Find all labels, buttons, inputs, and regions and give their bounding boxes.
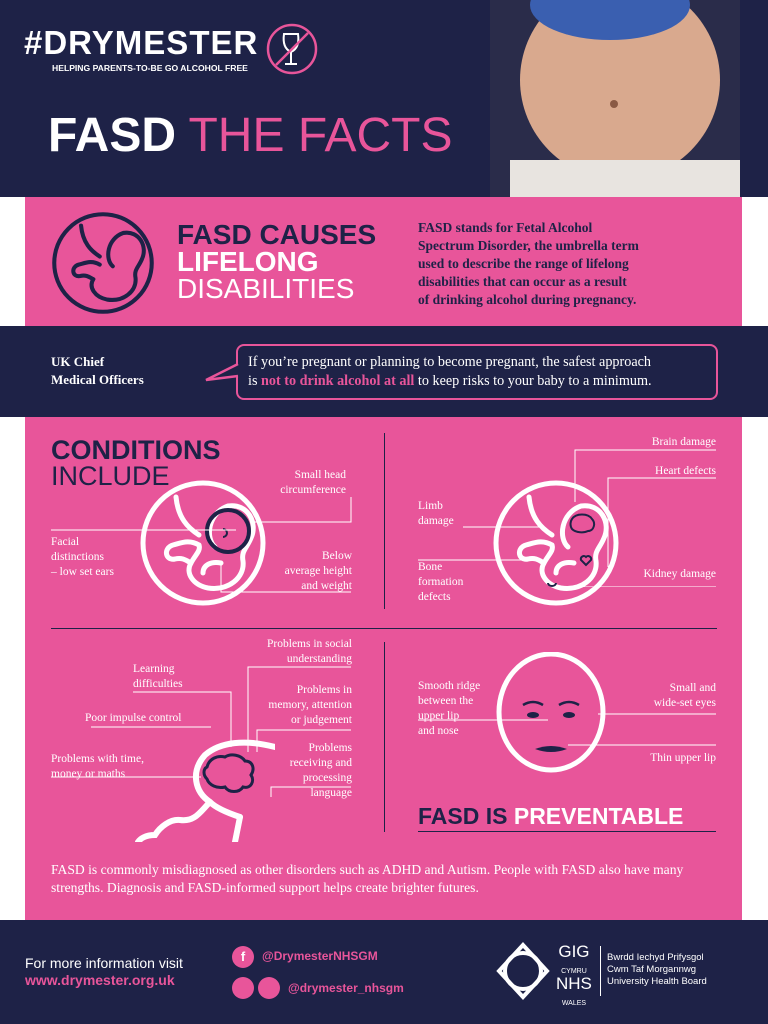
panel: conditions: money or maths bbox=[51, 768, 125, 780]
panel: conditions: Heart defects bbox=[655, 465, 716, 477]
heading: conditions include bbox=[51, 435, 221, 491]
panel: conditions: Problems with time, bbox=[51, 753, 144, 765]
panel: conditions: and weight bbox=[301, 580, 352, 592]
text block: bottom note: strengths. Diagnosis and FASD-informed support helps create brighter futures. bbox=[51, 880, 479, 895]
text block: bottom note bbox=[51, 862, 684, 895]
panel: conditions: processing bbox=[303, 772, 352, 784]
text block: FASD stands for Fetal Alcohol bbox=[418, 220, 592, 235]
panel: conditions: average height bbox=[285, 565, 352, 577]
panel: conditions: difficulties bbox=[133, 678, 183, 690]
heading: DISABILITIES bbox=[177, 273, 354, 304]
panel: conditions: Small head bbox=[295, 469, 346, 481]
text: more info: www.drymester.org.uk bbox=[25, 972, 175, 988]
panel: conditions: defects bbox=[418, 591, 451, 603]
panel: conditions: and nose bbox=[418, 725, 459, 737]
panel: conditions: Limb bbox=[418, 500, 443, 512]
panel: conditions: receiving and bbox=[290, 757, 352, 769]
panel: causes bbox=[25, 197, 742, 326]
text block: used to describe the range of lifelong bbox=[418, 256, 629, 271]
panel: conditions: Brain damage bbox=[652, 436, 716, 448]
logo bbox=[24, 24, 318, 74]
footer bbox=[0, 920, 768, 1024]
heading: FASD CAUSES bbox=[177, 219, 376, 250]
text: more info bbox=[25, 955, 183, 988]
icon: fetus quadrant 1 bbox=[140, 480, 266, 606]
heading bbox=[177, 219, 376, 304]
panel: conditions: Bone bbox=[418, 561, 442, 573]
social handles: @DrymesterNHSGM bbox=[262, 949, 378, 963]
panel: conditions: distinctions bbox=[51, 551, 104, 563]
header band bbox=[0, 0, 768, 197]
photo: pregnant belly bbox=[490, 0, 740, 197]
logo: NHS Wales: GIG bbox=[558, 942, 590, 961]
icon: head with brain bbox=[135, 740, 275, 842]
logo: NHS Wales bbox=[496, 942, 707, 1007]
callout: is not to drink alcohol at all to keep risks to your baby to a minimum. bbox=[248, 373, 652, 389]
panel: CMO advice: Medical Officers bbox=[51, 372, 144, 387]
text block: Spectrum Disorder, the umbrella term bbox=[418, 238, 639, 253]
panel: conditions: Learning bbox=[133, 663, 175, 675]
social handles: @drymester_nhsgm bbox=[288, 981, 404, 995]
text: more info: For more information visit bbox=[25, 955, 183, 971]
logo: HELPING PARENTS-TO-BE GO ALCOHOL FREE bbox=[52, 63, 248, 73]
social handles: f bbox=[241, 949, 245, 964]
panel: conditions: circumference bbox=[280, 484, 346, 496]
social handles bbox=[232, 946, 404, 999]
panel: conditions: Thin upper lip bbox=[650, 752, 716, 764]
text block: bottom note: FASD is commonly misdiagnosed as other disorders such as ADHD and Autism. People with FASD also have many bbox=[51, 862, 683, 877]
panel: conditions: Below bbox=[322, 550, 352, 562]
panel: conditions: Kidney damage bbox=[644, 568, 716, 580]
logo: NHS Wales: CYMRU bbox=[561, 968, 587, 975]
panel: conditions: damage bbox=[418, 515, 454, 527]
panel: conditions: between the bbox=[418, 695, 473, 707]
callout bbox=[236, 344, 718, 400]
divider lines bbox=[384, 433, 385, 609]
panel: conditions: Facial bbox=[51, 536, 79, 548]
icon: fetus bbox=[52, 212, 154, 314]
panel: conditions: memory, attention bbox=[268, 699, 352, 711]
panel: conditions: Problems in bbox=[297, 684, 352, 696]
icon: face bbox=[496, 652, 606, 772]
panel: conditions: Poor impulse control bbox=[85, 712, 181, 724]
panel: conditions: Problems bbox=[309, 742, 352, 754]
logo: NHS Wales: University Health Board bbox=[607, 976, 707, 987]
panel: CMO advice bbox=[0, 326, 768, 417]
heading: conditions include: CONDITIONS bbox=[51, 435, 221, 465]
title: FASD THE FACTS bbox=[48, 109, 453, 162]
text block: of drinking alcohol during pregnancy. bbox=[418, 292, 636, 307]
panel: conditions: Small and bbox=[670, 682, 716, 694]
panel: conditions: wide-set eyes bbox=[654, 697, 716, 709]
logo: NHS Wales: NHS bbox=[556, 974, 592, 993]
panel: conditions bbox=[25, 417, 742, 920]
panel: CMO advice: UK Chief bbox=[51, 354, 104, 369]
panel: conditions: formation bbox=[418, 576, 463, 588]
logo: #DRYMESTER bbox=[24, 24, 258, 61]
heading: LIFELONG bbox=[177, 246, 319, 277]
panel: conditions: understanding bbox=[287, 653, 352, 665]
icon: no alcohol bbox=[266, 24, 318, 74]
panel: conditions: upper lip bbox=[418, 710, 459, 722]
panel: conditions: Problems in social bbox=[267, 638, 352, 650]
logo: NHS Wales: Cwm Taf Morgannwg bbox=[607, 964, 696, 975]
text block: disabilities that can occur as a result bbox=[418, 274, 627, 289]
panel: conditions: – low set ears bbox=[51, 566, 114, 578]
footer: WALES bbox=[562, 1000, 586, 1007]
callout: If you’re pregnant or planning to become pregnant, the safest approach bbox=[248, 354, 651, 370]
panel: conditions: or judgement bbox=[291, 714, 352, 726]
icon: fetus quadrant 2 bbox=[494, 480, 618, 606]
panel: conditions: Smooth ridge bbox=[418, 680, 480, 692]
panel: conditions: language bbox=[310, 787, 352, 799]
heading: FASD is preventable: FASD IS PREVENTABLE bbox=[418, 803, 683, 829]
heading: conditions include: INCLUDE bbox=[51, 461, 170, 491]
logo: NHS Wales: Bwrdd Iechyd Prifysgol bbox=[607, 952, 704, 963]
text block bbox=[418, 220, 639, 307]
